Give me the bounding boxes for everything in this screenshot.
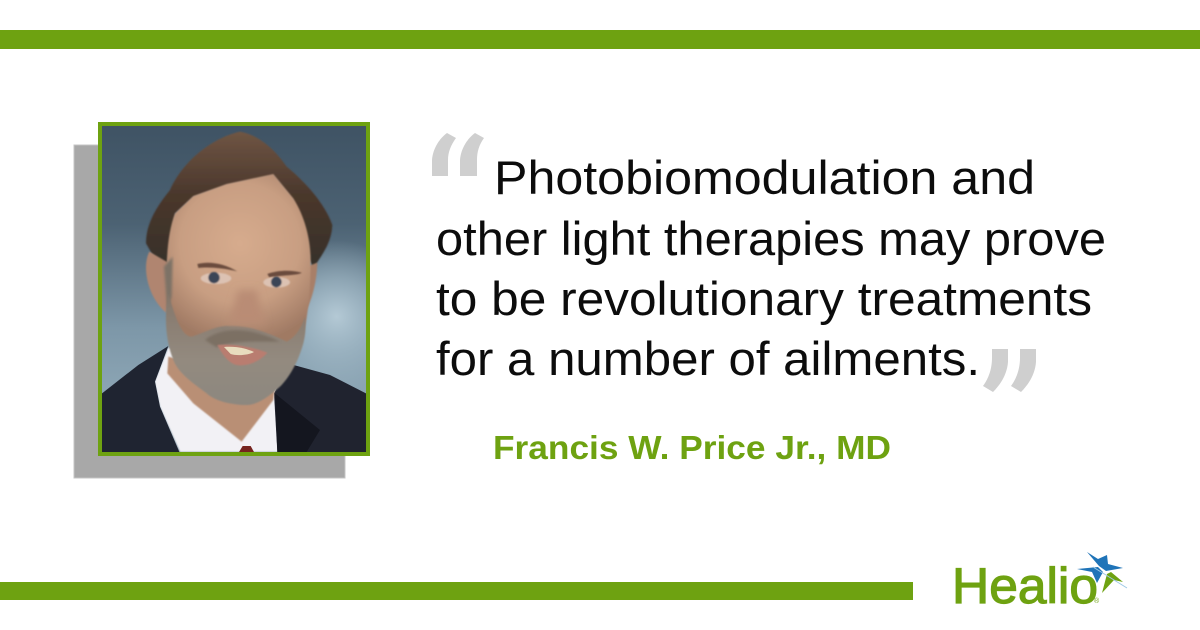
neck <box>167 357 275 442</box>
photo backdrop <box>102 126 366 452</box>
bottom green bar <box>0 582 913 600</box>
right ear <box>307 262 318 308</box>
right eyebrow <box>267 271 302 277</box>
top green bar <box>0 30 1200 49</box>
nose shading <box>234 289 260 314</box>
logo wordmark: Healio <box>952 558 1098 614</box>
tie <box>239 446 254 452</box>
closing quotation mark <box>983 349 1036 392</box>
portrait photo with green frame <box>98 122 370 456</box>
quotation text: other light therapies may prove <box>436 212 1106 265</box>
quotation text: Photobiomodulation and <box>494 151 1035 204</box>
face <box>166 174 311 350</box>
right eye <box>263 277 290 288</box>
teeth <box>224 347 254 355</box>
logo star <box>1077 552 1127 593</box>
quotation text <box>436 151 1106 385</box>
beard <box>166 293 305 405</box>
left eyebrow <box>197 263 237 271</box>
Healio logo <box>952 552 1127 614</box>
jacket left <box>102 346 179 452</box>
left ear <box>145 251 168 312</box>
grey shadow panel behind portrait <box>74 145 345 478</box>
registered mark: ® <box>1094 597 1100 605</box>
shirt <box>155 347 278 452</box>
quotation text: for a number of ailments. <box>436 332 980 385</box>
quotation text: to be revolutionary treatments <box>436 272 1092 325</box>
lapel shade <box>275 393 320 452</box>
moustache <box>205 330 280 347</box>
side hair shadow <box>164 257 173 310</box>
hair <box>146 132 332 270</box>
jacket right <box>274 364 366 452</box>
lips <box>217 345 267 365</box>
attribution: Francis W. Price Jr., MD <box>493 429 891 466</box>
left eye <box>201 272 231 284</box>
opening quotation mark <box>432 133 484 176</box>
